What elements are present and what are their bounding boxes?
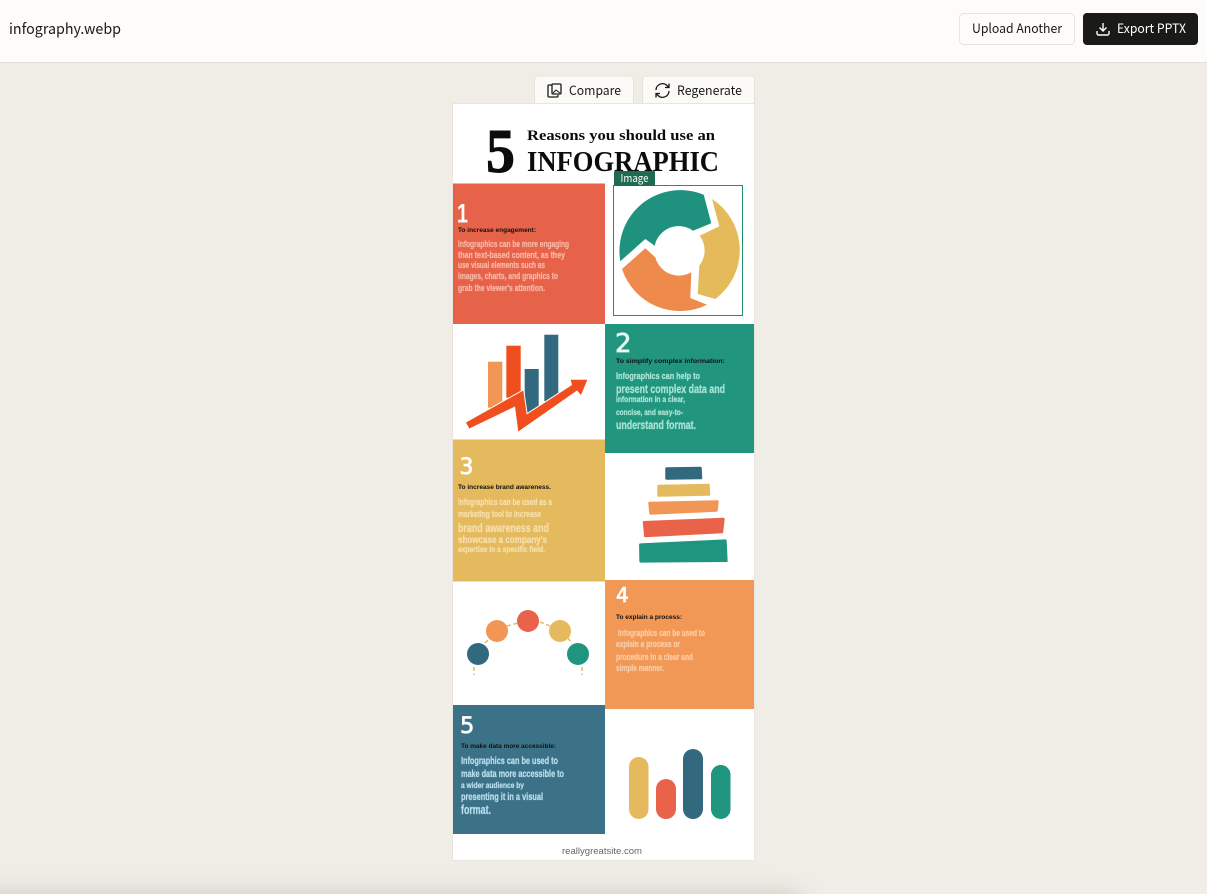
panel 4: process: simple manner.: [616, 663, 664, 673]
panel 3: brand awareness: [453, 440, 605, 582]
icon: rising bar chart with arrow: [466, 335, 587, 432]
panel 5: accessibility: a wider audience by: [461, 780, 524, 790]
button: upload another: [960, 14, 1074, 44]
image tag: Image: [620, 171, 649, 186]
panel 4: process: Infographics can be used to: [618, 628, 705, 638]
panel 2: simplify: information in a clear,: [616, 394, 685, 404]
panel 1: engagement: grab the viewer's attention.: [458, 283, 545, 293]
panel 3: brand awareness: marketing tool to increase: [458, 509, 541, 519]
panel 1: engagement: images, charts, and graphics to: [458, 271, 558, 281]
icon: stacked pyramid: [640, 468, 726, 561]
panel 1: engagement: than text-based content, as they: [458, 250, 566, 261]
panel 1: engagement: 1: [457, 198, 468, 228]
panel 2: simplify: present complex data and: [616, 384, 725, 396]
panel 5: accessibility: format.: [461, 803, 491, 817]
panel 5: accessibility: To make data more accessible:: [461, 743, 556, 750]
panel 1: engagement: [453, 184, 605, 324]
button: compare: Compare: [569, 80, 621, 99]
button: compare: [534, 76, 634, 106]
file name: infography.webp: [9, 18, 121, 39]
panel 3: brand awareness: To increase brand awareness.: [458, 484, 551, 491]
title: [486, 118, 719, 186]
panel 2: simplify: understand format.: [616, 418, 696, 432]
button: export pptx: Export PPTX: [1117, 18, 1187, 37]
panel 5: accessibility: [453, 705, 605, 834]
infographic card: [452, 104, 754, 860]
button: upload another: Upload Another: [972, 18, 1063, 37]
title line 1: Reasons you should use an: [527, 128, 716, 144]
panel 4: process: [605, 580, 754, 709]
panel 5: accessibility: make data more accessible to: [461, 769, 564, 780]
panel 4: process: To explain a process:: [616, 614, 682, 621]
panel 2: simplify: 2: [615, 329, 632, 359]
panel 1: engagement: use visual elements such as: [458, 260, 545, 270]
panel 3: brand awareness: expertise in a specific field.: [458, 544, 545, 554]
panel 3: brand awareness: 3: [460, 455, 474, 480]
panel 2: simplify: concise, and easy-to-: [616, 407, 683, 417]
panel 5: accessibility: 5: [460, 713, 474, 739]
big numeral 5: 5: [486, 118, 515, 186]
panel 1: engagement: To increase engagement:: [458, 227, 536, 234]
panel 4: process: 4: [616, 583, 629, 607]
top bar: [0, 0, 1207, 63]
panel 5: accessibility: Infographics can be used to: [461, 755, 558, 767]
button: regenerate: [642, 76, 754, 106]
panel 4: process: explain a process or: [616, 639, 680, 649]
panel 1: engagement: Infographics can be more engaging: [458, 239, 569, 250]
panel 2: simplify: To simplify complex information:: [616, 358, 725, 365]
button: regenerate: Regenerate: [677, 80, 742, 99]
title line 2: INFOGRAPHIC: [527, 146, 719, 178]
panel 5: accessibility: presenting it in a visual: [461, 792, 543, 803]
selection box with image tag: [614, 171, 742, 316]
panel 3: brand awareness: Infographics can be used as a: [458, 497, 553, 507]
panel 2: simplify: Infographics can help to: [616, 371, 700, 382]
panel 2: simplify: [605, 324, 754, 453]
icon: connected circles arc: [467, 610, 589, 675]
panel 3: brand awareness: brand awareness and: [458, 521, 549, 535]
panel 3: brand awareness: showcase a company's: [458, 534, 547, 546]
icon: cycle arrows: [619, 190, 740, 311]
footer url: reallygreatsite.com: [562, 846, 642, 857]
icon: rounded pill bars: [629, 749, 730, 819]
panel 4: process: procedure in a clear and: [616, 652, 693, 662]
button: export pptx: [1083, 13, 1198, 45]
